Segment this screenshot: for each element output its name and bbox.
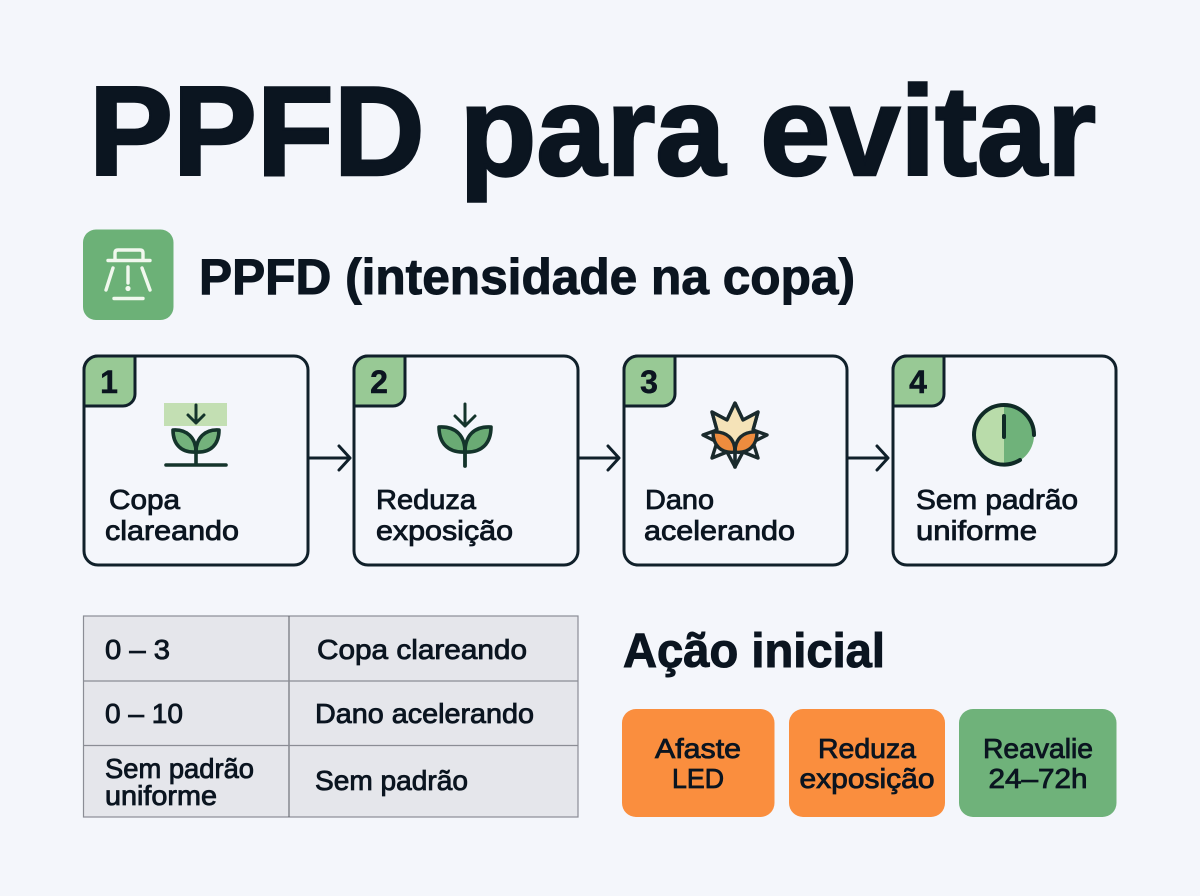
section heading: PPFD (intensidade na copa) — [199, 249, 855, 305]
badge 4 — [893, 356, 944, 406]
action: reduza exposição: exposição — [800, 763, 934, 794]
panel: step 1 — [84, 356, 308, 565]
row 3: Sem padrão — [105, 753, 254, 784]
row 2: 0 – 10 — [105, 698, 183, 729]
step 3 label: Dano — [645, 484, 714, 515]
step 4 label — [916, 484, 1078, 546]
table — [84, 616, 578, 817]
badge 3 — [624, 356, 675, 406]
row 1 — [105, 634, 527, 665]
row 2 — [105, 698, 534, 729]
icon: burned leaves — [703, 403, 767, 467]
row 2: Dano acelerando — [315, 698, 534, 729]
icon: plant under light — [164, 403, 227, 465]
step 4 label: Sem padrão — [916, 484, 1078, 515]
panel: step 3 — [624, 356, 847, 565]
step 1 label: clareando — [105, 515, 239, 546]
action: reavalie: 24–72h — [988, 763, 1088, 794]
row 3: Sem padrão — [315, 765, 468, 796]
action: reavalie: Reavalie — [983, 733, 1093, 764]
row 3 — [105, 753, 468, 811]
title: PPFD para evitar — [89, 60, 1096, 202]
step 1 label: Copa — [109, 484, 180, 515]
icon: LED lamp — [83, 230, 174, 320]
action: reavalie — [959, 709, 1116, 817]
icon: leaves with arrow — [439, 404, 491, 466]
badge 2: 2 — [370, 364, 388, 400]
step 3 label — [644, 484, 795, 546]
step 4 label: uniforme — [916, 515, 1037, 546]
step 3 label: acelerando — [644, 515, 795, 546]
badge 4: 4 — [909, 364, 927, 400]
step 2 label: exposição — [376, 515, 513, 546]
step 1 label — [105, 484, 239, 546]
badge 1: 1 — [100, 364, 118, 400]
action: reduza exposição: Reduza — [818, 733, 916, 764]
arrow 3 — [847, 446, 888, 470]
badge 1 — [84, 356, 135, 406]
arrow 1 — [308, 446, 350, 470]
panel: step 2 — [354, 356, 578, 565]
panel: step 4 — [893, 356, 1116, 565]
arrow 2 — [578, 446, 619, 470]
heading: ação inicial: Ação inicial — [623, 625, 885, 678]
row 1: Copa clareando — [317, 634, 527, 665]
badge 2 — [354, 356, 405, 406]
row 1: 0 – 3 — [105, 634, 170, 665]
row 3: uniforme — [105, 780, 217, 811]
action: reduza exposição — [789, 709, 945, 817]
step 2 label — [376, 484, 513, 546]
icon: uneven gauge — [974, 405, 1034, 465]
action: afaste LED — [622, 709, 774, 817]
action: afaste LED: Afaste — [655, 733, 741, 764]
action: afaste LED: LED — [672, 763, 724, 794]
badge 3: 3 — [640, 364, 658, 400]
step 2 label: Reduza — [376, 484, 476, 515]
